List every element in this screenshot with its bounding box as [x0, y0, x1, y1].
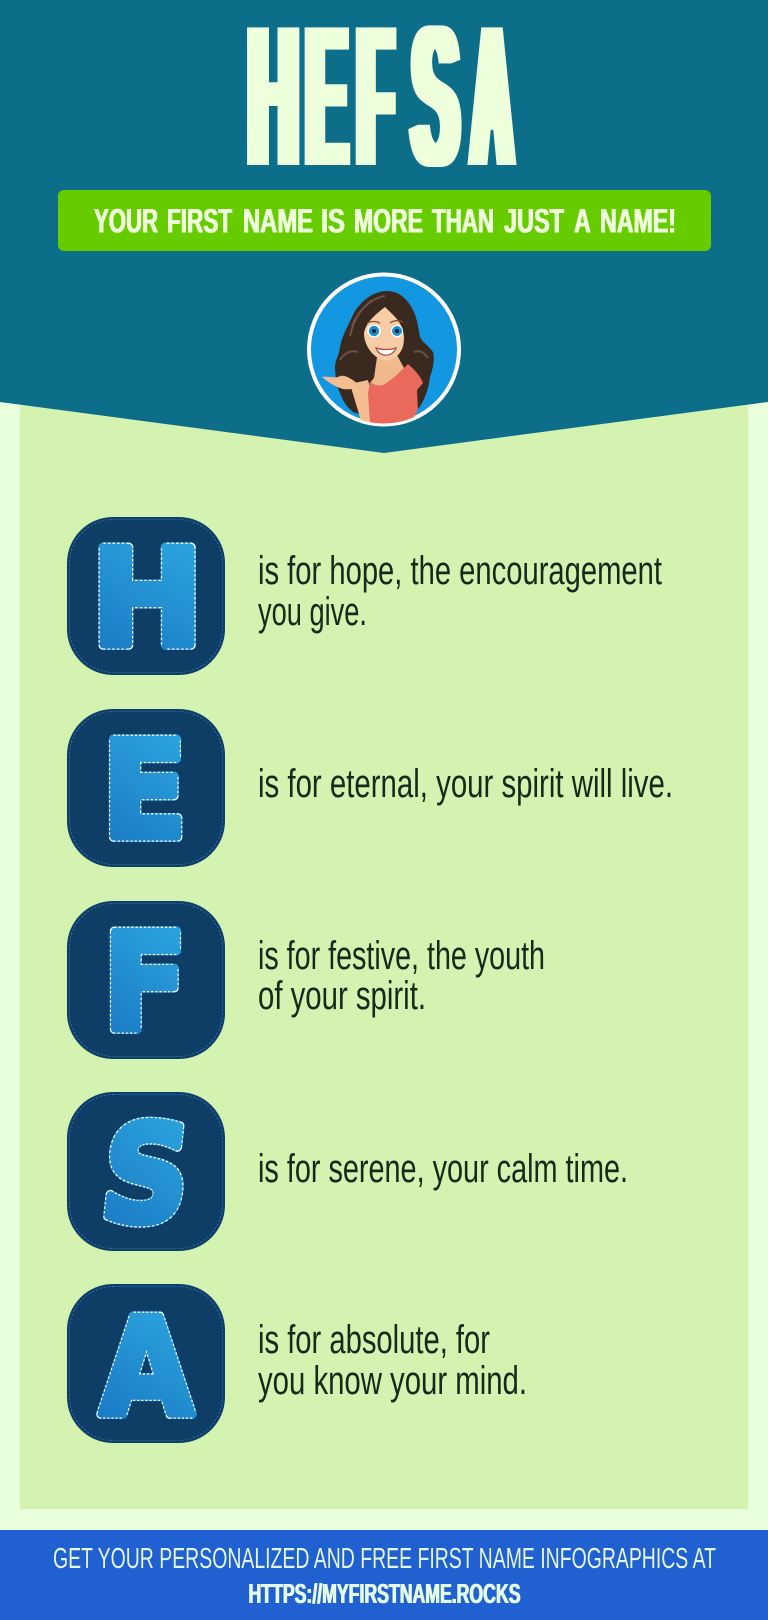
- tagline bar: IS: [321, 202, 345, 240]
- badge: E: E: [102, 713, 187, 869]
- badge: F: F: [103, 905, 187, 1061]
- badge: E: E: [102, 713, 187, 869]
- badge: H: H: [91, 521, 203, 677]
- row: E: [67, 709, 673, 869]
- tagline bar: YOUR: [94, 202, 158, 240]
- badge: S: S: [94, 1096, 198, 1253]
- panel: content: [20, 390, 748, 1509]
- row: F: [67, 901, 545, 1061]
- footer: [0, 1530, 768, 1620]
- tagline bar: [58, 190, 711, 251]
- tagline bar: JUST: [504, 202, 564, 240]
- badge: A: [67, 1284, 225, 1446]
- text: A: you know your mind.: [258, 1359, 527, 1403]
- tagline bar: FIRST: [167, 202, 232, 240]
- tagline bar: THAN: [432, 202, 494, 240]
- badge: A: A: [100, 1290, 193, 1446]
- badge: F: F: [103, 905, 187, 1061]
- badge: E: E: [102, 713, 187, 869]
- tagline bar: A: [574, 202, 590, 240]
- badge: S: S: [94, 1096, 198, 1253]
- tagline bar: NAME: [243, 202, 313, 240]
- badge: A: A: [100, 1290, 193, 1446]
- row: S: [67, 1092, 628, 1253]
- text: H: you give.: [258, 590, 367, 634]
- avatar: [309, 274, 459, 424]
- text: F: is for festive, the youth: [258, 934, 545, 978]
- row: H: [67, 517, 662, 677]
- badge: S: S: [94, 1096, 198, 1253]
- footer link: HTTPS://MYFIRSTNAME.ROCKS: [248, 1578, 520, 1609]
- badge: A: A: [100, 1290, 193, 1446]
- badge: H: H: [91, 521, 203, 677]
- header banner: [0, 0, 768, 453]
- badge: F: [67, 901, 225, 1061]
- text: A: is for absolute, for: [258, 1318, 490, 1362]
- tagline bar: NAME!: [600, 202, 676, 240]
- badge: E: [67, 709, 225, 869]
- badge: S: [67, 1092, 225, 1253]
- tagline bar: MORE: [354, 202, 423, 240]
- badge: F: F: [103, 905, 187, 1061]
- badge: H: [67, 517, 225, 677]
- text: S: is for serene, your calm time.: [258, 1147, 628, 1191]
- text: F: of your spirit.: [258, 974, 426, 1018]
- badge: H: H: [91, 521, 203, 677]
- row: A: [67, 1284, 527, 1446]
